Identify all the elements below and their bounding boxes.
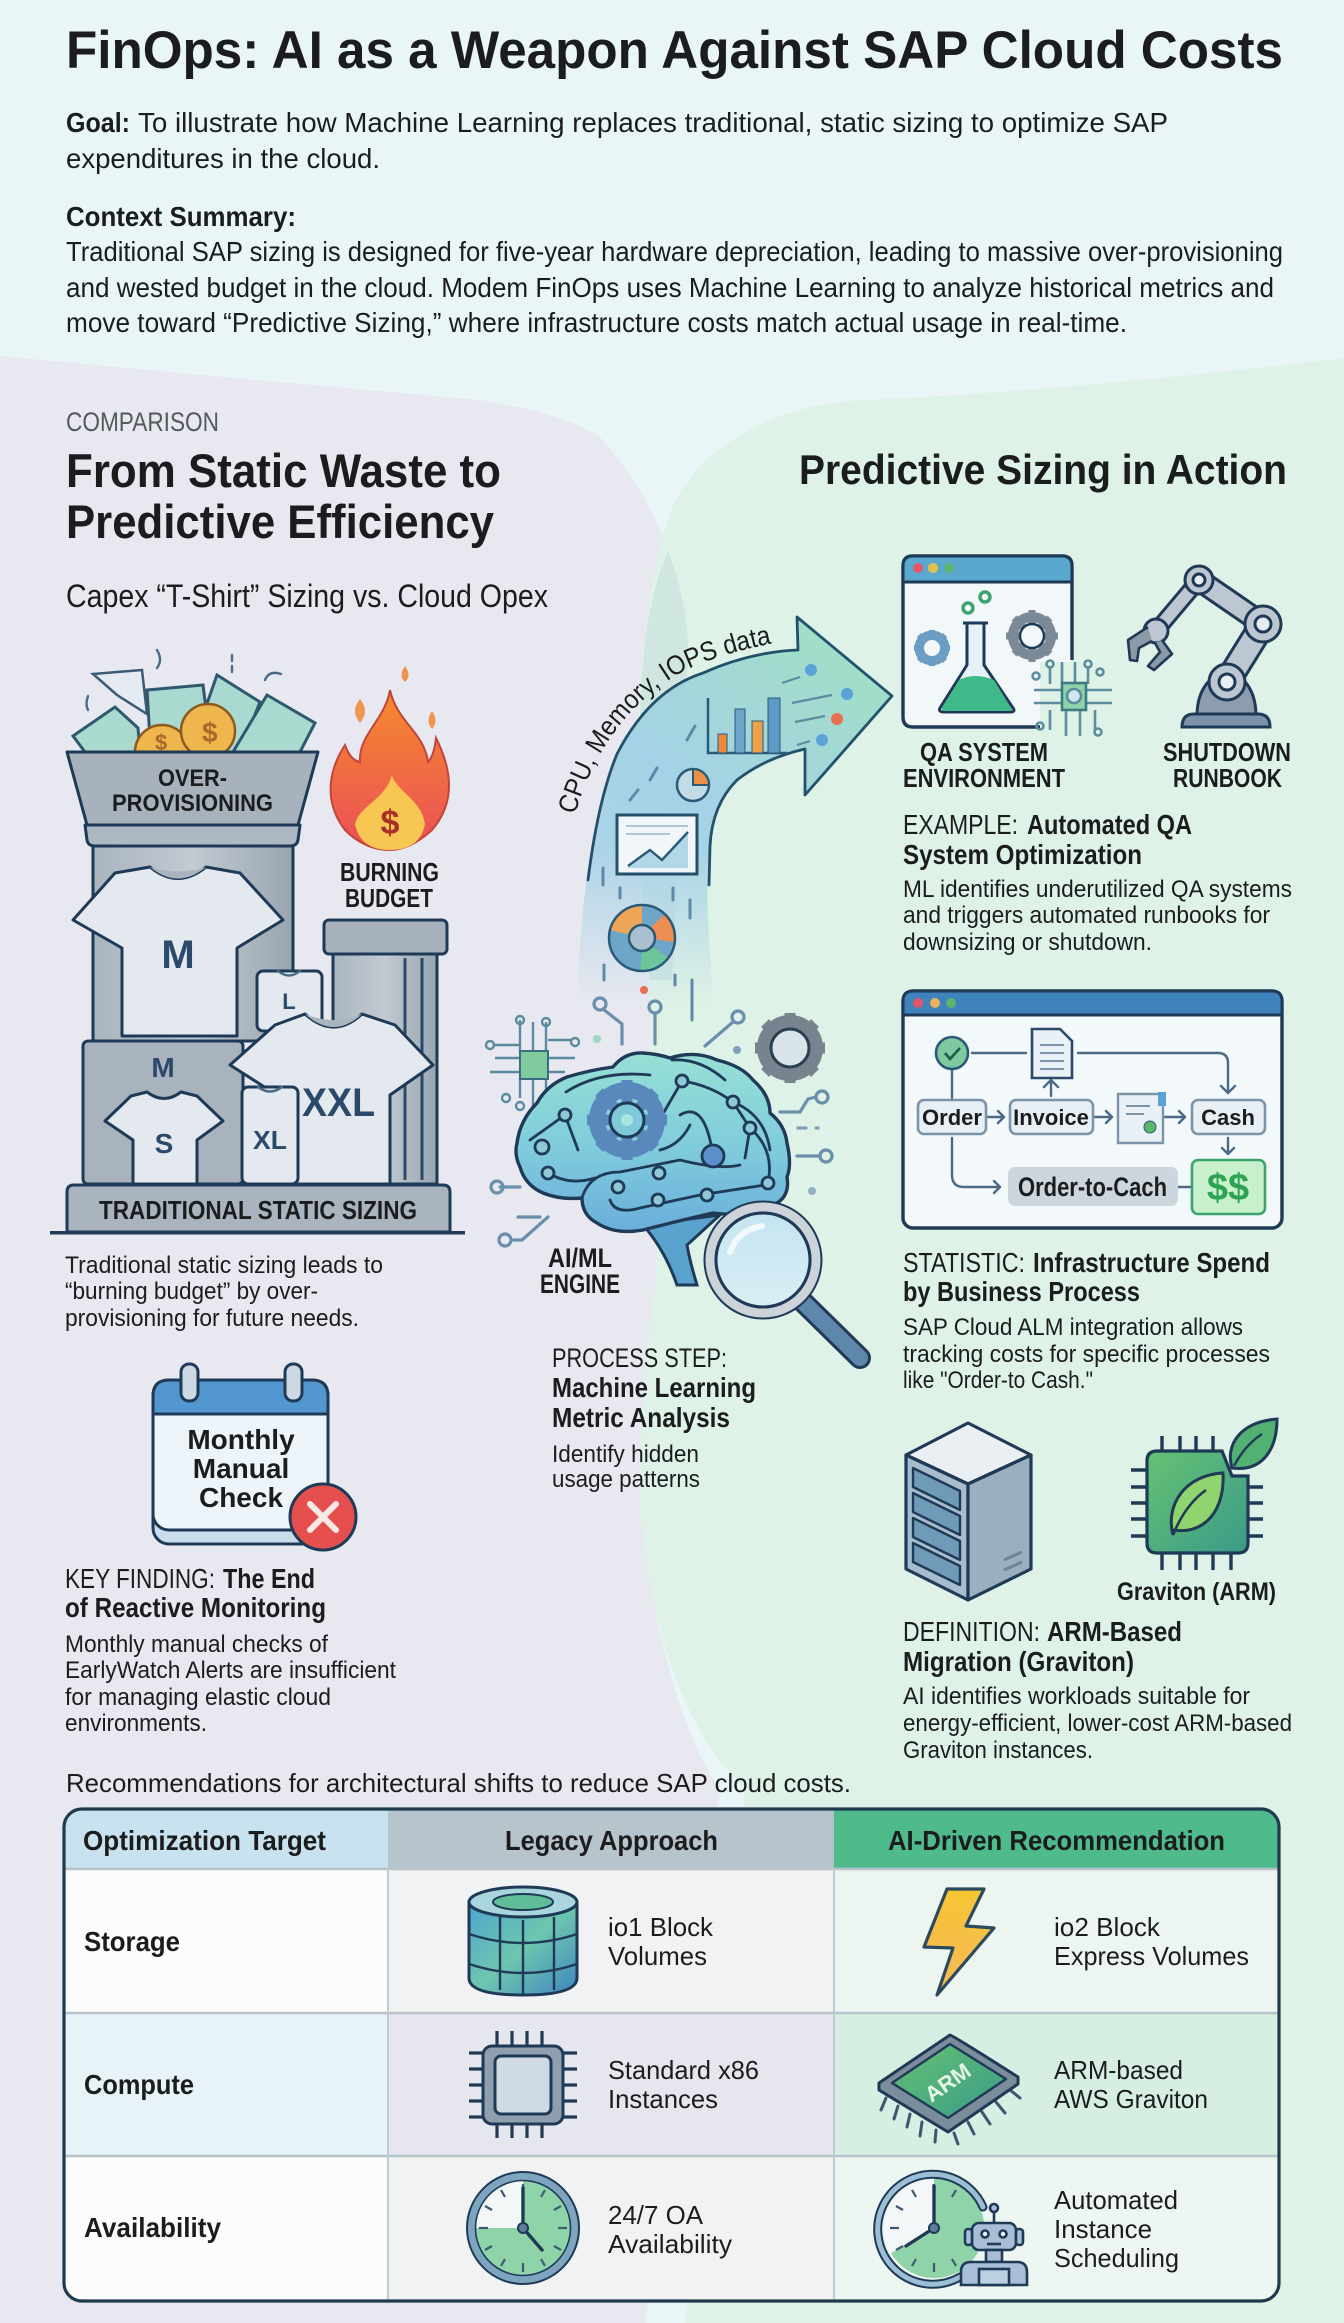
icon: burning budget flame: $ (381, 804, 400, 842)
icon: gear (755, 1013, 825, 1083)
chart: order-to-cash process window (903, 991, 1282, 1228)
chart: order-to-cash process window: $$ (1207, 1167, 1249, 1209)
chart: order-to-cash process window: Cash (1201, 1105, 1255, 1130)
table text: AI-driven: io2 Block (1054, 1912, 1161, 1942)
icon: small chip (1032, 660, 1112, 736)
table text: legacy (608, 1912, 759, 2259)
example: automated QA system optimization: EXAMPLE: (903, 809, 1018, 840)
t-shirt XXL (230, 1014, 433, 1184)
process step: machine learning metric analysis: usage patterns (552, 1466, 700, 1493)
chart: order-to-cash process window: Invoice (1013, 1105, 1089, 1130)
icon: money overflow: $ (202, 717, 218, 748)
statistic: infrastructure spend by business process: SAP Cloud ALM integration allows (903, 1314, 1243, 1341)
header cells (64, 1809, 388, 1869)
header labels: Legacy Approach (505, 1825, 718, 1856)
line chart card (617, 815, 697, 874)
pie icon (677, 769, 709, 801)
icon: ARM chip: ARM (920, 2058, 975, 2107)
icon: ARM chip (879, 2035, 1020, 2144)
arrow label: CPU, Memory, IOPS data (559, 630, 772, 812)
row labels: Storage (84, 1926, 180, 1957)
icon: flask (940, 592, 1014, 712)
label: burning budget: BURNING (340, 857, 439, 887)
arrow: metrics flow into QA system (577, 617, 892, 1020)
text: static sizing note: “burning budget” by over- (65, 1278, 318, 1305)
example: automated QA system optimization: System Optimization (903, 839, 1142, 870)
labels: QA system environment and shutdown runbook: SHUTDOWN (1163, 737, 1291, 767)
box L: L (282, 989, 296, 1014)
hopper: over-provisioning: OVER- (158, 765, 227, 792)
right pillar (333, 954, 437, 1184)
right panel heading: Predictive Sizing in Action (799, 446, 1287, 493)
left panel subheading: Capex “T-Shirt” Sizing vs. Cloud Opex (66, 578, 548, 614)
title: FinOps: AI as a Weapon Against SAP Cloud Costs (66, 21, 1283, 80)
process step: machine learning metric analysis (552, 1343, 756, 1493)
statistic: infrastructure spend by business process: like "Order-to Cash." (903, 1367, 1093, 1394)
left panel heading: From Static Waste to (66, 444, 501, 497)
icon: circuit nodes around brain (491, 998, 832, 1246)
icon: money overflow: $ (155, 730, 167, 755)
example: automated QA system optimization: downsizing or shutdown. (903, 929, 1152, 956)
base: traditional static sizing: TRADITIONAL STATIC SIZING (99, 1195, 417, 1225)
definition: ARM-based migration: ARM-Based (1047, 1616, 1182, 1647)
icon: server (906, 1423, 1031, 1600)
icon: x86 chip (469, 2031, 577, 2138)
box L (257, 971, 322, 1031)
icon: block storage database (469, 1887, 577, 1995)
process boxes (918, 1100, 1265, 1134)
icon: gears (914, 610, 1058, 666)
table text: AI-driven: Instance (1054, 2214, 1152, 2244)
illustration: traditional static sizing: M (151, 1052, 175, 1083)
table: recommendations (64, 1809, 1279, 2301)
statistic: infrastructure spend by business process: STATISTIC: (903, 1247, 1025, 1278)
label: burning budget (340, 857, 439, 913)
icon: burning budget flame (331, 666, 449, 850)
icon: AI brain (516, 1053, 790, 1285)
process step: machine learning metric analysis: Identify hidden (552, 1441, 699, 1468)
key finding: end of reactive monitoring: of Reactive Monitoring (65, 1592, 326, 1623)
text: static sizing note: provisioning for future needs. (65, 1305, 359, 1332)
label: AI/ML engine (540, 1243, 620, 1299)
icon: QA system window (903, 556, 1112, 736)
header labels: AI-Driven Recommendation (888, 1825, 1225, 1856)
t-shirt S: S (155, 1128, 173, 1159)
label: burning budget: BUDGET (345, 883, 433, 913)
label: AI/ML engine: AI/ML (548, 1243, 612, 1273)
panel: static waste background (0, 356, 720, 2323)
context summary: move toward “Predictive Sizing,” where infrastructure costs match actual usage in real-time. (66, 307, 1127, 338)
statistic: infrastructure spend by business process: tracking costs for specific processes (903, 1341, 1270, 1368)
context summary: and wested budget in the cloud. Modem FinOps uses Machine Learning to analyze historical metrics and (66, 272, 1274, 303)
goal text: expenditures in the cloud. (66, 143, 380, 174)
statistic: infrastructure spend by business process (903, 1247, 1270, 1394)
table text: AI-driven: Automated (1054, 2185, 1178, 2215)
table intro: Recommendations for architectural shifts to reduce SAP cloud costs. (66, 1768, 851, 1798)
t-shirt XL: XL (253, 1125, 287, 1155)
t-shirt M (73, 867, 283, 1036)
key finding: end of reactive monitoring: Monthly manual checks of (65, 1631, 328, 1658)
row labels (84, 1926, 221, 2243)
icon: lightning bolt (924, 1889, 994, 1995)
table text: legacy: Availability (608, 2229, 732, 2259)
icon: monthly manual check calendar (153, 1364, 356, 1550)
icon: money overflow (73, 650, 315, 758)
table text: legacy: Volumes (608, 1941, 707, 1971)
base: traditional static sizing (50, 1185, 465, 1234)
panel: predictive sizing background (636, 358, 1344, 2323)
key finding: end of reactive monitoring: for managing elastic cloud (65, 1684, 331, 1711)
statistic: infrastructure spend by business process: by Business Process (903, 1276, 1140, 1307)
example: automated QA system optimization: Automated QA (1027, 809, 1192, 840)
hopper: over-provisioning (67, 752, 318, 825)
context summary: Context Summary: (66, 201, 296, 232)
goal text: To illustrate how Machine Learning replaces traditional, static sizing to optimize SAP (138, 107, 1168, 138)
row labels: Availability (84, 2212, 221, 2243)
key finding: end of reactive monitoring (65, 1563, 396, 1737)
example: automated QA system optimization (903, 809, 1292, 956)
table text: AI-driven: Express Volumes (1054, 1941, 1249, 1971)
text: static sizing note: Traditional static sizing leads to (65, 1252, 383, 1279)
definition: ARM-based migration (903, 1616, 1292, 1764)
pillar behind (93, 846, 293, 1041)
robot (961, 2204, 1027, 2285)
icon: chip circuit (486, 1016, 579, 1110)
hopper: over-provisioning: PROVISIONING (112, 790, 273, 817)
collar (85, 825, 300, 846)
document icon (1032, 1029, 1072, 1078)
bar chart (708, 698, 787, 753)
comparison label: COMPARISON (66, 407, 219, 437)
data particles (603, 726, 695, 1020)
labels: QA system environment and shutdown runbook: ENVIRONMENT (903, 763, 1065, 793)
process step: machine learning metric analysis: PROCESS STEP: (552, 1343, 727, 1373)
example: automated QA system optimization: ML identifies underutilized QA systems (903, 876, 1292, 903)
example: automated QA system optimization: and triggers automated runbooks for (903, 902, 1270, 929)
key finding: end of reactive monitoring: KEY FINDING: (65, 1563, 215, 1594)
icon: magnifying glass (710, 1207, 860, 1358)
definition: ARM-based migration: DEFINITION: (903, 1616, 1040, 1647)
check node (936, 1037, 968, 1069)
definition: ARM-based migration: energy-efficient, lower-cost ARM-based (903, 1710, 1292, 1737)
definition: ARM-based migration: Migration (Graviton) (903, 1646, 1134, 1677)
icon: robot arm (1128, 566, 1281, 727)
flow arrows (952, 1053, 1235, 1193)
t-shirt S (105, 1092, 223, 1184)
key finding: end of reactive monitoring: environments. (65, 1710, 207, 1737)
icon: monthly manual check calendar: Check (199, 1482, 283, 1513)
key finding: end of reactive monitoring: EarlyWatch Alerts are insufficient (65, 1657, 396, 1684)
receipt icon (1118, 1092, 1166, 1143)
panel overlap (639, 550, 688, 980)
definition: ARM-based migration: Graviton instances. (903, 1737, 1093, 1764)
t-shirt XL (242, 1087, 298, 1184)
statistic: infrastructure spend by business process: Infrastructure Spend (1033, 1247, 1270, 1278)
definition: ARM-based migration: AI identifies workloads suitable for (903, 1683, 1250, 1710)
process step: machine learning metric analysis: Metric Analysis (552, 1402, 730, 1433)
header labels: Optimization Target (83, 1825, 326, 1856)
table text: legacy: Standard x86 (608, 2055, 759, 2085)
table text: AI-driven: Scheduling (1054, 2243, 1179, 2273)
labels: QA system environment and shutdown runbook: RUNBOOK (1173, 763, 1282, 793)
chart: order-to-cash process window: Order-to-Cach (1018, 1172, 1167, 1202)
labels: QA system environment and shutdown runbook: QA SYSTEM (920, 737, 1048, 767)
table text: AI-driven: AWS Graviton (1054, 2084, 1208, 2114)
t-shirt M: M (161, 933, 195, 977)
process step: machine learning metric analysis: Machine Learning (552, 1372, 756, 1403)
table text: legacy: Instances (608, 2084, 718, 2114)
icon: clock (467, 2172, 579, 2284)
labels: QA system environment and shutdown runbook (903, 737, 1291, 793)
table text: AI-driven (1054, 1912, 1249, 2273)
icon: graviton green chip (1131, 1419, 1277, 1570)
icon: monthly manual check calendar: Monthly (187, 1424, 295, 1455)
chart: order-to-cash process window: Order (922, 1105, 982, 1130)
context summary (66, 201, 1283, 338)
donut chart (609, 905, 675, 971)
t-shirt XXL: XXL (302, 1081, 375, 1125)
left panel heading (66, 444, 501, 548)
row labels: Compute (84, 2069, 194, 2100)
header labels (83, 1825, 1225, 1856)
label: AI/ML engine: ENGINE (540, 1269, 620, 1299)
icon: clock with robot (878, 2174, 1027, 2285)
text: static sizing note (65, 1252, 383, 1332)
label: graviton (ARM): Graviton (ARM) (1117, 1578, 1276, 1606)
lower box (83, 1041, 243, 1184)
table text: legacy: 24/7 OA (608, 2200, 704, 2230)
illustration: traditional static sizing (50, 650, 465, 1234)
icon: monthly manual check calendar: Manual (193, 1453, 289, 1484)
table text: legacy: io1 Block (608, 1912, 714, 1942)
key finding: end of reactive monitoring: The End (223, 1563, 315, 1594)
goal text (66, 107, 1168, 174)
left panel heading: Predictive Efficiency (66, 495, 494, 548)
brain gear (587, 1080, 667, 1160)
table text: AI-driven: ARM-based (1054, 2055, 1183, 2085)
goal text: Goal: (66, 107, 130, 138)
